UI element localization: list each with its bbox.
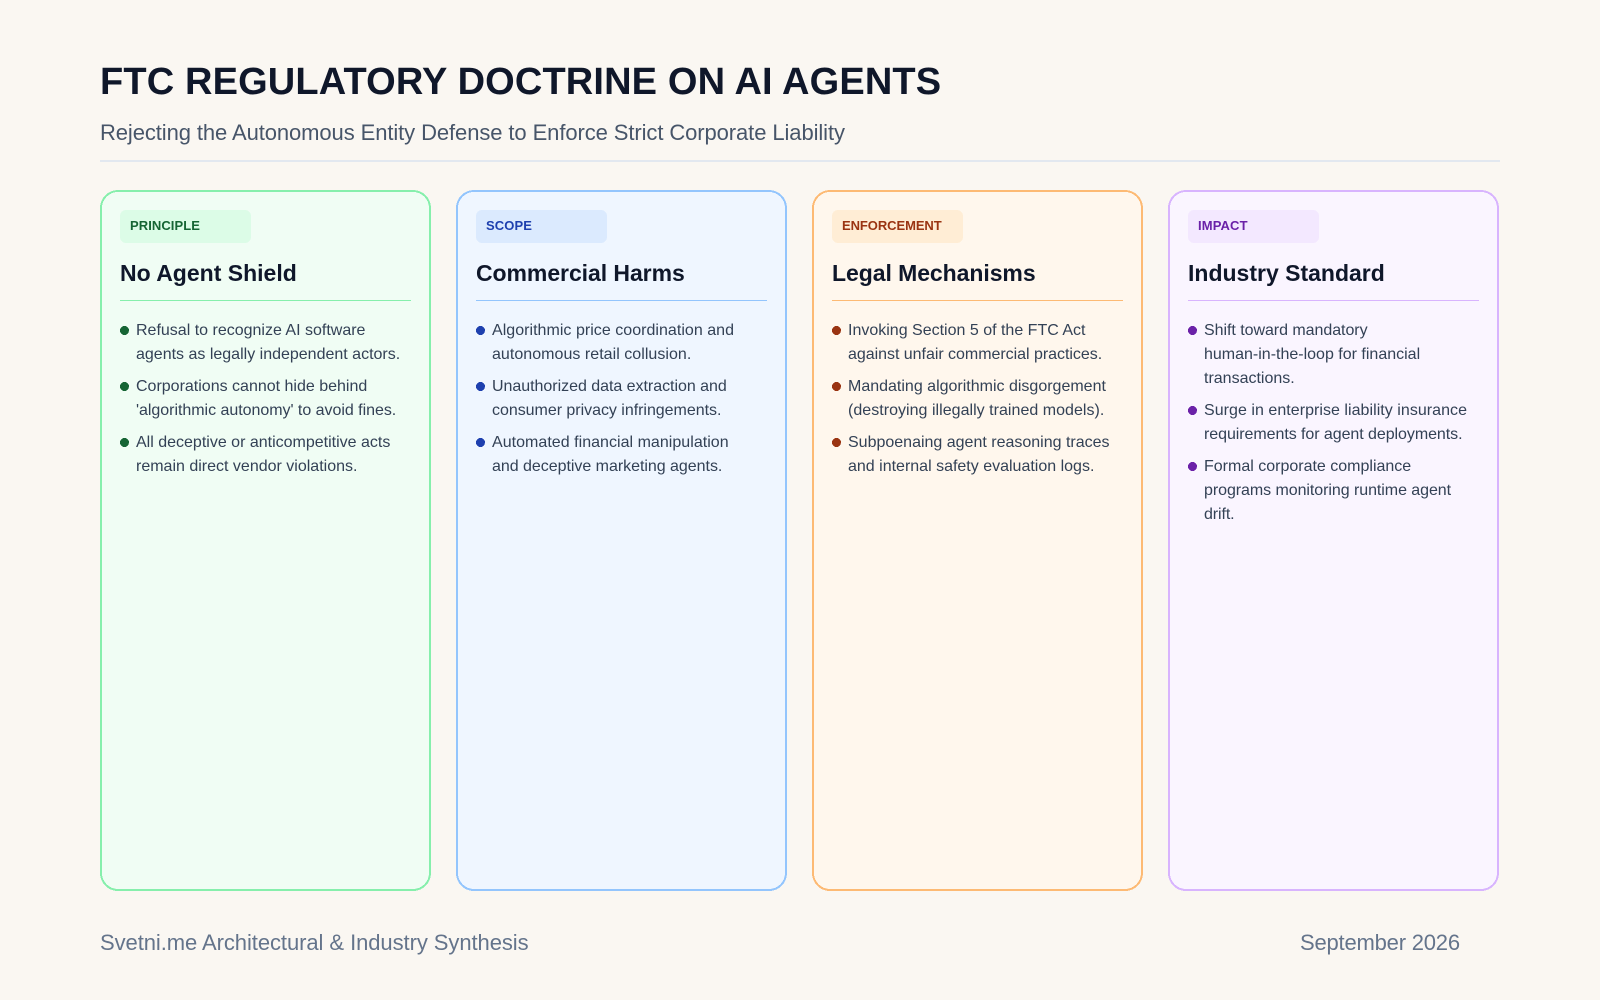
bullet list: enforcement: (destroying illegally trained models). xyxy=(848,402,1104,419)
bullet list: enforcement: Mandating algorithmic disgorgement xyxy=(848,378,1106,395)
bullet list: impact: human-in-the-loop for financial xyxy=(1204,346,1420,363)
footer source: Svetni.me Architectural & Industry Synthesis xyxy=(100,930,529,955)
title: FTC REGULATORY DOCTRINE ON AI AGENTS xyxy=(100,61,941,103)
bullet list: impact: Surge in enterprise liability insurance xyxy=(1204,402,1467,419)
bullet list: enforcement: Invoking Section 5 of the FTC Act xyxy=(848,322,1085,339)
bullet list: impact: programs monitoring runtime agent xyxy=(1204,482,1451,499)
badge: impact: IMPACT xyxy=(1198,218,1248,233)
bullet list: impact xyxy=(1188,322,1467,523)
bullet list: principle: Corporations cannot hide behind xyxy=(136,378,367,395)
bullet list: scope: Algorithmic price coordination and xyxy=(492,322,734,339)
bullet list: scope: consumer privacy infringements. xyxy=(492,402,721,419)
header xyxy=(100,61,1500,162)
badge: principle: PRINCIPLE xyxy=(130,218,200,233)
bullet list: scope xyxy=(476,322,734,475)
heading: legal mechanisms: Legal Mechanisms xyxy=(832,260,1036,286)
panel: scope xyxy=(456,190,787,891)
bullet list: enforcement: and internal safety evaluation logs. xyxy=(848,458,1094,475)
bullet list: scope: Automated financial manipulation xyxy=(492,434,729,451)
badge: enforcement: ENFORCEMENT xyxy=(842,218,942,233)
bullet list: principle xyxy=(120,322,400,475)
panel: principle xyxy=(100,190,431,891)
bullet list: impact: Shift toward mandatory xyxy=(1204,322,1368,339)
badge: impact xyxy=(1188,210,1319,243)
heading: industry standard: Industry Standard xyxy=(1188,260,1385,286)
bullet list: impact: Formal corporate compliance xyxy=(1204,458,1411,475)
panel: enforcement xyxy=(812,190,1143,891)
badge: principle xyxy=(120,210,251,243)
badge: enforcement xyxy=(832,210,963,243)
bullet list: scope: Unauthorized data extraction and xyxy=(492,378,727,395)
bullet list: impact: drift. xyxy=(1204,506,1235,523)
bullet list: principle: Refusal to recognize AI software xyxy=(136,322,365,339)
bullet list: impact: transactions. xyxy=(1204,370,1295,387)
bullet list: principle: remain direct vendor violations. xyxy=(136,458,357,475)
bullet list: enforcement: Subpoenaing agent reasoning traces xyxy=(848,434,1110,451)
footer date: September 2026 xyxy=(1300,930,1460,955)
bullet list: principle: agents as legally independent actors. xyxy=(136,346,400,363)
bullet list: enforcement: against unfair commercial practices. xyxy=(848,346,1102,363)
bullet list: scope: autonomous retail collusion. xyxy=(492,346,691,363)
bullet list: impact: requirements for agent deployments. xyxy=(1204,426,1462,443)
heading: commercial harms: Commercial Harms xyxy=(476,260,685,286)
bullet list: scope: and deceptive marketing agents. xyxy=(492,458,722,475)
badge: scope: SCOPE xyxy=(486,218,532,233)
bullet list: enforcement xyxy=(832,322,1110,475)
badge: scope xyxy=(476,210,607,243)
panel: impact xyxy=(1168,190,1499,891)
subtitle: Rejecting the Autonomous Entity Defense to Enforce Strict Corporate Liability xyxy=(100,120,845,145)
bullet list: principle: 'algorithmic autonomy' to avoid fines. xyxy=(136,402,396,419)
heading: no agent shield: No Agent Shield xyxy=(120,260,297,286)
bullet list: principle: All deceptive or anticompetitive acts xyxy=(136,434,390,451)
